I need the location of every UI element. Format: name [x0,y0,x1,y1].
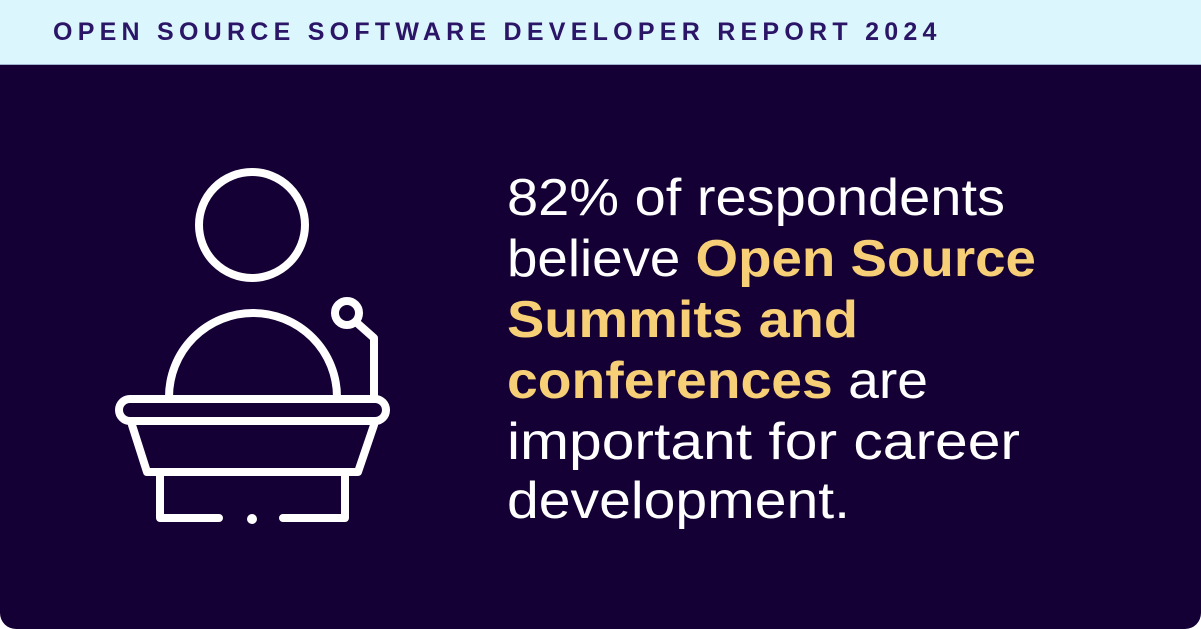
text block: statistic statement: believe Open Source [507,230,1036,288]
text block: statistic statement: 82% of respondents [507,169,1005,227]
text block: statistic statement: Summits and [507,291,858,349]
text block: statistic statement: development. [507,472,850,530]
text block: statistic statement: important for career [507,413,1020,471]
text block: statistic statement: conferences are [507,352,928,410]
header band [0,0,1201,65]
header band: OPEN SOURCE SOFTWARE DEVELOPER REPORT 2024 [53,18,942,46]
